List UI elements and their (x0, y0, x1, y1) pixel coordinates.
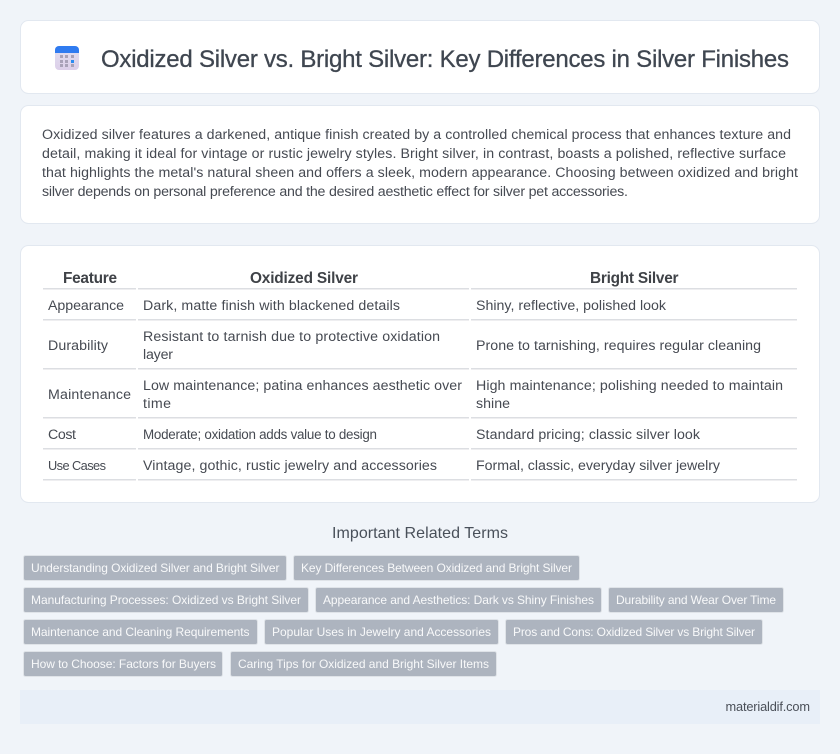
tag (24, 620, 258, 644)
row: durability: Prone to tarnishing, requires regular cleaning (476, 338, 761, 354)
tag: Appearance and Aesthetics: Dark vs Shiny Finishes (323, 593, 594, 607)
row: maintenance: High maintenance; polishing needed to maintain (476, 378, 783, 394)
panel: comparison table (20, 246, 820, 502)
title: Oxidized Silver vs. Bright Silver: Key Differences in Silver Finishes (101, 46, 789, 73)
table header row: Bright Silver (590, 270, 678, 287)
row: appearance: Appearance (48, 298, 124, 314)
description text (42, 127, 798, 200)
row: maintenance (48, 378, 783, 412)
related term tags (24, 556, 784, 676)
row: durability: Resistant to tarnish due to protective oxidation (143, 329, 440, 345)
row: maintenance: Maintenance (48, 387, 131, 403)
table header row: Feature (63, 270, 117, 287)
tag: Pros and Cons: Oxidized Silver vs Bright Silver (513, 625, 755, 639)
row: cost: Standard pricing; classic silver look (476, 427, 701, 443)
tag: Manufacturing Processes: Oxidized vs Bright Silver (31, 593, 301, 607)
tag (506, 620, 762, 644)
tag: Durability and Wear Over Time (616, 593, 776, 607)
description text: that highlights the metal's natural sheen and offers a sleek, modern appearance. Choosing between oxidized and bright (42, 165, 798, 181)
tag: Understanding Oxidized Silver and Bright Silver (31, 561, 280, 575)
header panel (20, 20, 820, 94)
row: durability: Durability (48, 338, 109, 354)
row: durability: layer (143, 347, 173, 363)
tag (316, 588, 602, 612)
tag (230, 652, 496, 676)
tag: Popular Uses in Jewelry and Accessories (272, 625, 491, 639)
tag: Key Differences Between Oxidized and Bright Silver (301, 561, 572, 575)
row: cost: Cost (48, 427, 76, 443)
row: use cases (48, 458, 721, 474)
row: appearance (48, 298, 667, 314)
footer source: materialdif.com (726, 699, 810, 714)
row: appearance: Shiny, reflective, polished look (476, 298, 667, 314)
tag (24, 588, 308, 612)
tag: Maintenance and Cleaning Requirements (31, 625, 250, 639)
row: appearance: Dark, matte finish with blackened details (143, 298, 400, 314)
row: maintenance: time (143, 396, 171, 412)
row: use cases: Vintage, gothic, rustic jewelry and accessories (143, 458, 437, 474)
description text: silver depends on personal preference and the desired aesthetic effect for silver pet accessories. (42, 184, 628, 200)
panel: description (20, 106, 820, 224)
tag: Caring Tips for Oxidized and Bright Silver Items (238, 657, 489, 671)
row: maintenance: shine (476, 396, 510, 412)
heading: related terms: Important Related Terms (332, 525, 508, 542)
table header row: Oxidized Silver (250, 270, 358, 287)
row: maintenance: Low maintenance; patina enhances aesthetic over (143, 378, 462, 394)
table header row (63, 270, 678, 287)
tag: How to Choose: Factors for Buyers (31, 657, 216, 671)
tag (608, 588, 784, 612)
row: use cases: Use Cases (48, 458, 106, 473)
footer (20, 690, 820, 724)
tag (24, 556, 286, 580)
tag (294, 556, 580, 580)
row: use cases: Formal, classic, everyday silver jewelry (476, 458, 721, 474)
tag (24, 652, 222, 676)
tag (264, 620, 498, 644)
description text: Oxidized silver features a darkened, antique finish created by a controlled chemical process that enhances texture and (42, 127, 791, 143)
description text: detail, making it ideal for vintage or rustic jewelry styles. Bright silver, in contrast, boasts a polished, reflective surface (42, 146, 786, 162)
icon: calendar (55, 46, 79, 70)
row: cost (48, 427, 701, 443)
row: cost: Moderate; oxidation adds value to design (143, 427, 377, 442)
row: durability (48, 329, 761, 363)
